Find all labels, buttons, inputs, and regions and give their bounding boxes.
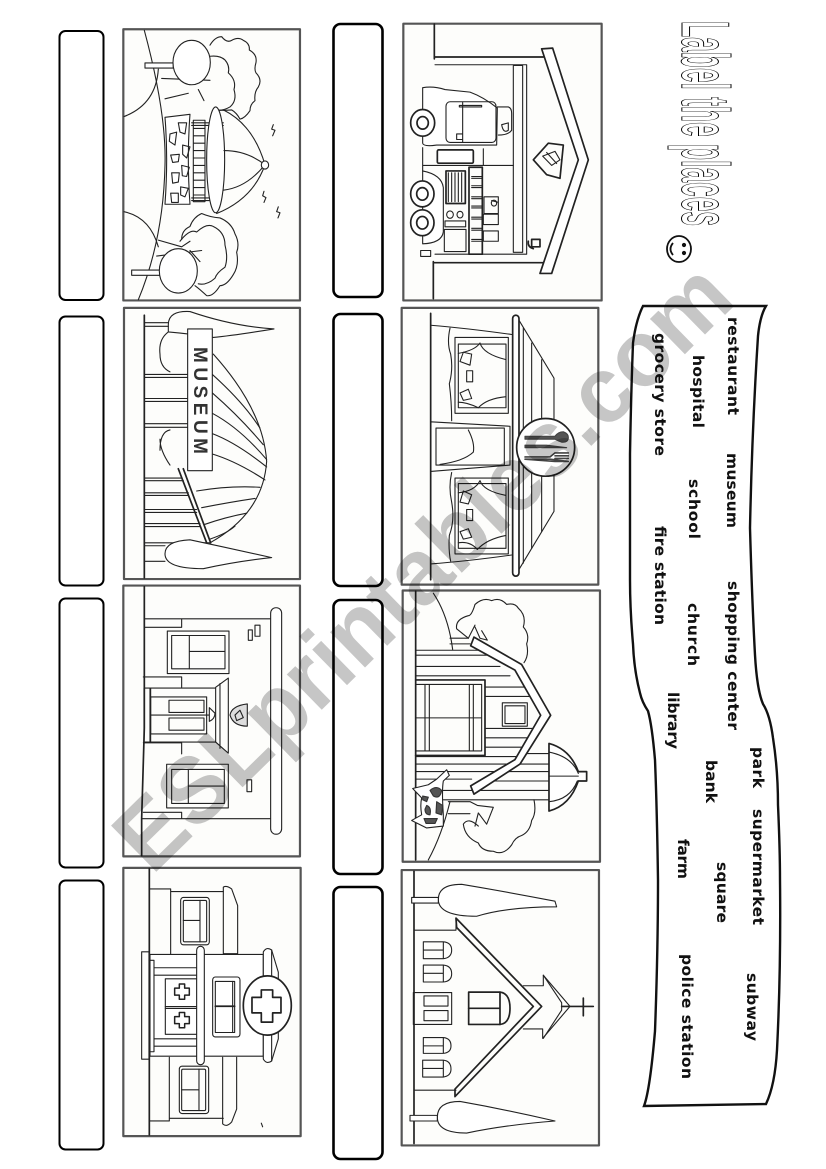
word: library: library (664, 692, 682, 749)
panel: fire station (403, 24, 602, 300)
panel: restaurant (402, 308, 598, 585)
word: supermarket: supermarket (749, 809, 767, 926)
word: park: park (749, 747, 767, 789)
word: bank: bank (702, 760, 720, 804)
panel: park (123, 29, 300, 300)
word: church: church (684, 603, 702, 666)
text: Label the places (667, 21, 743, 226)
word: restaurant: restaurant (724, 317, 742, 416)
word: school: school (685, 479, 703, 539)
panel: farm (403, 591, 600, 862)
word: farm: farm (674, 839, 692, 879)
panel: church (402, 870, 599, 1145)
panel: police station (123, 586, 300, 856)
panel: museum (124, 308, 300, 579)
panel: hospital (123, 868, 301, 1136)
word: grocery store: grocery store (651, 333, 669, 456)
word: hospital: hospital (689, 355, 707, 428)
word bank panel (630, 306, 780, 1106)
word: subway: subway (743, 973, 761, 1041)
answer box column 1 (60, 31, 104, 1150)
watermark: ESLprintables.com (93, 242, 752, 890)
icon: smiley (667, 236, 691, 262)
answer box column 2 (334, 24, 382, 1159)
word: square: square (713, 862, 731, 923)
word: fire station: fire station (651, 526, 669, 625)
museum sign text: MUSEUM (189, 347, 210, 454)
word: museum: museum (723, 453, 741, 528)
word: shopping center: shopping center (724, 581, 742, 730)
word: police station: police station (678, 954, 696, 1079)
